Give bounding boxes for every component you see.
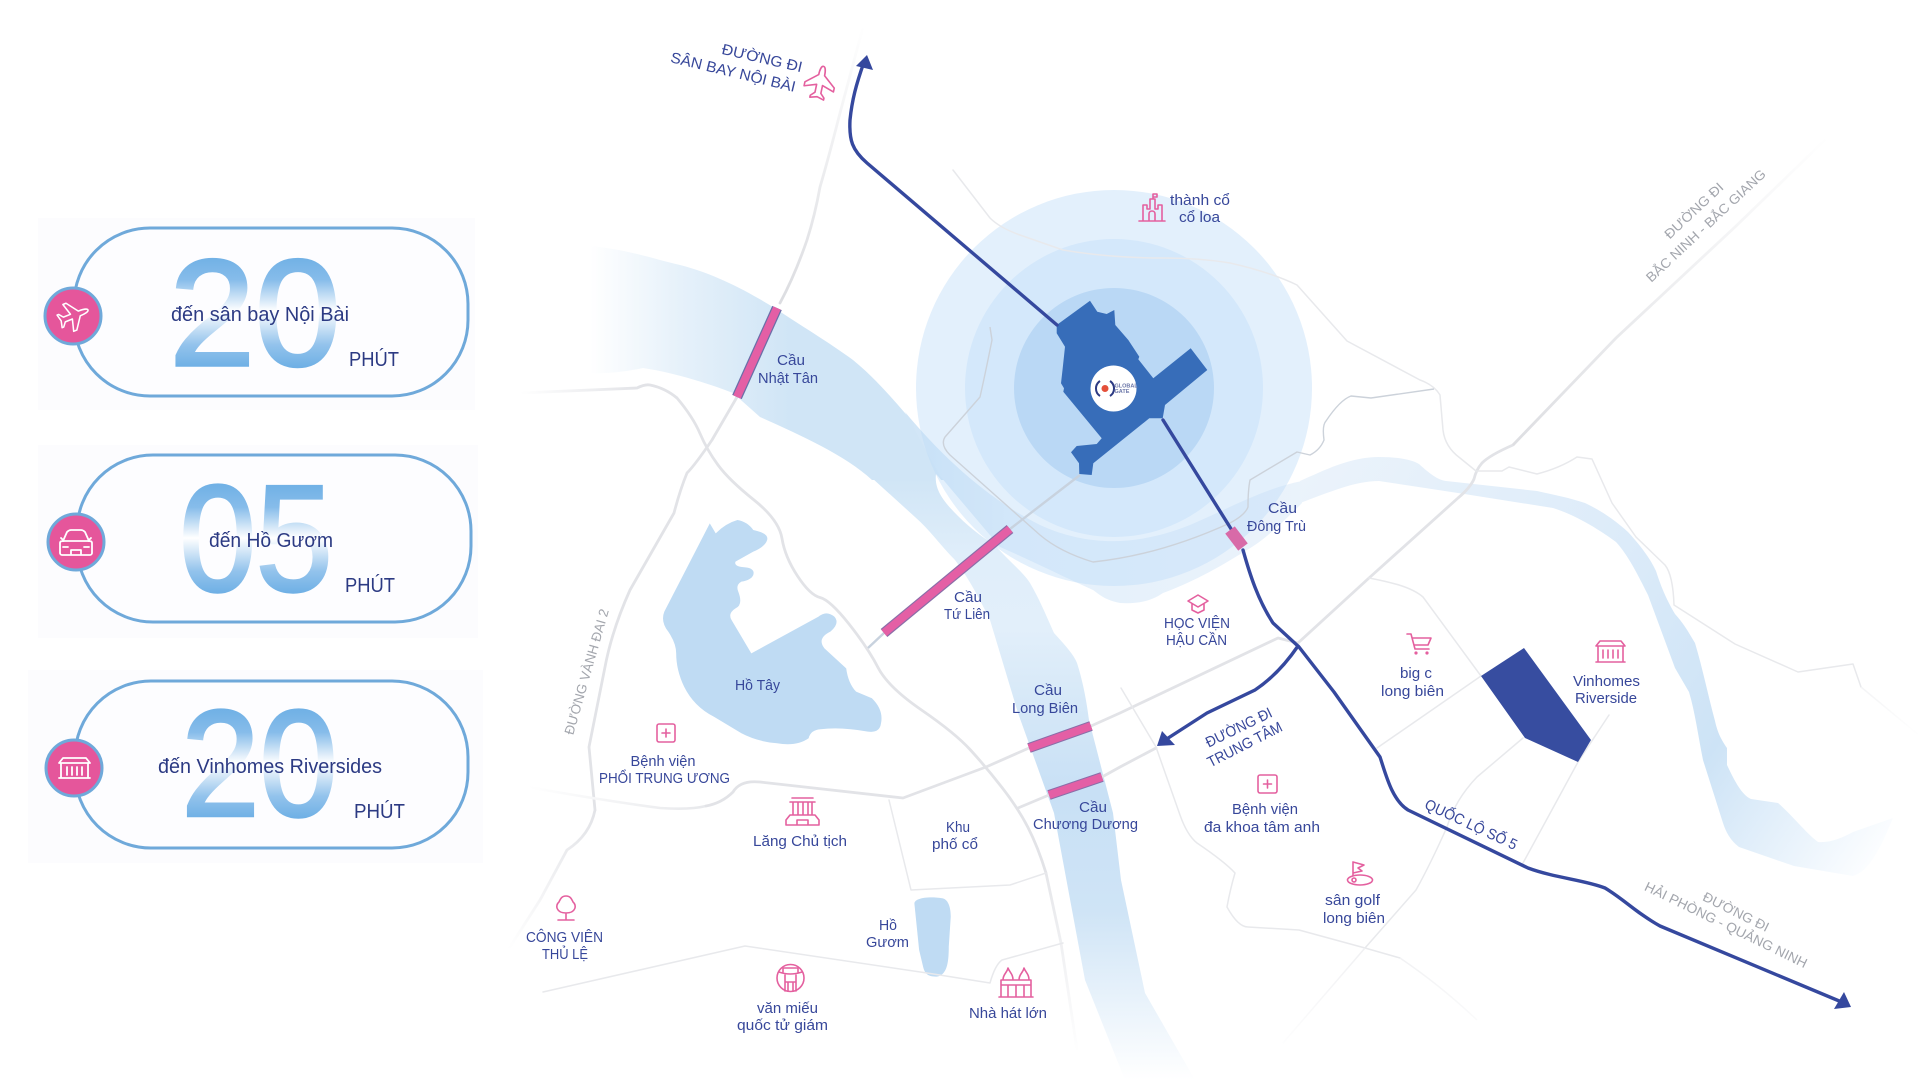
label: Hồ Gươm: Hồ xyxy=(879,917,897,934)
label: Khu phố cổ: phố cổ xyxy=(932,836,978,853)
panel: 05 minutes to Hồ Gươm xyxy=(38,445,478,638)
caption: đến sân bay Nội Bài xyxy=(171,304,349,326)
icon: villa badge xyxy=(46,740,102,796)
icon: graduation cap xyxy=(1188,595,1208,613)
landmark: Vinhomes Riverside xyxy=(1573,641,1640,707)
landmark: Học viện Hậu Cần: HỌC VIỆN xyxy=(1164,615,1230,632)
site radius circles xyxy=(916,190,1312,586)
landmark: Sân golf Long Biên: long biên xyxy=(1323,910,1385,927)
icon: villa xyxy=(1596,641,1625,662)
icon: shopping cart xyxy=(1407,634,1431,655)
landmark: Thành cổ Cổ Loa xyxy=(1139,192,1230,226)
lake: Hồ Tây xyxy=(663,520,882,744)
landmark: Vinhomes Riverside: Vinhomes xyxy=(1573,673,1640,690)
caption: đến Vinhomes Riversides xyxy=(158,756,382,778)
landmark: Bệnh viện Phổi Trung Ương: PHỔI TRUNG ƯƠNG xyxy=(599,769,730,787)
unit: PHÚT xyxy=(354,800,405,823)
icon: airplane badge xyxy=(45,288,101,344)
landmark: Công viên Thủ Lệ: CÔNG VIÊN xyxy=(526,929,603,946)
icon: golf flag xyxy=(1348,862,1372,885)
landmark: Vinhomes Riverside: Riverside xyxy=(1575,690,1637,707)
site: Global Gate plot xyxy=(1057,301,1207,475)
label: road to city centre: TRUNG TÂM xyxy=(1205,719,1285,771)
landmark: Big C Long Biên: big c xyxy=(1400,665,1433,682)
label: road to Nội Bài airport: ĐƯỜNG ĐI xyxy=(720,41,804,76)
landmark: Sân golf Long Biên: sân golf xyxy=(1325,892,1381,909)
site: Vinhomes Riverside plot xyxy=(1481,648,1591,762)
landmark: Nhà hát lớn: Nhà hát lớn xyxy=(969,1005,1047,1022)
bridge: Tứ Liên xyxy=(884,529,1010,633)
label: Cầu Nhật Tân: Cầu xyxy=(777,352,805,369)
label: Cầu Đông Trù: Đông Trù xyxy=(1247,518,1306,535)
landmark: Văn Miếu Quốc Tử Giám: văn miếu xyxy=(757,1000,818,1017)
site: Global Gate logo xyxy=(1090,366,1138,412)
icon: tree xyxy=(557,896,575,920)
label: Cầu Long Biên xyxy=(1012,682,1078,717)
landmark: Công viên Thủ Lệ xyxy=(526,896,603,963)
site: Global Gate logo: GLOBAL xyxy=(1114,384,1138,390)
landmark: Văn Miếu Quốc Tử Giám xyxy=(737,964,828,1034)
icon: opera house xyxy=(999,968,1033,997)
landmark: Sân golf Long Biên xyxy=(1323,862,1385,927)
route: to Nội Bài airport xyxy=(850,55,1057,325)
label: Khu phố cổ: Khu xyxy=(946,819,970,836)
label: road to Hải Phòng - Quảng Ninh: HẢI PHÒNG - QUẢNG NINH xyxy=(1642,879,1810,971)
panel: 20 minutes to Vinhomes Riverside xyxy=(28,670,483,863)
landmark: Big C Long Biên: long biên xyxy=(1381,683,1444,700)
landmark: Lăng Chủ tịch xyxy=(753,798,847,850)
landmark: Học viện Hậu Cần xyxy=(1164,595,1230,649)
river: Red River north section xyxy=(587,246,945,480)
landmark: Nhà hát lớn xyxy=(969,968,1047,1022)
label: road to Bắc Ninh - Bắc Giang: BẮC NINH - BẮC GIANG xyxy=(1643,166,1769,285)
big number 20: 20 xyxy=(170,228,340,397)
label: Cầu Chương Dương xyxy=(1033,799,1138,833)
bridge: Đông Trù xyxy=(1230,530,1243,547)
landmark: Bệnh viện Tâm Anh: Bệnh viện xyxy=(1232,801,1298,818)
landmark: Thành cổ Cổ Loa: cổ loa xyxy=(1179,209,1221,226)
label: road to Hải Phòng - Quảng Ninh: ĐƯỜNG ĐI xyxy=(1700,889,1772,935)
label: Cầu Long Biên: Cầu xyxy=(1034,682,1062,699)
label: Cầu Chương Dương: Cầu xyxy=(1079,799,1107,816)
lake: Hồ Gươm xyxy=(914,897,951,977)
icon: hospital xyxy=(657,724,675,742)
road network xyxy=(508,27,1920,1050)
landmark: Học viện Hậu Cần: HẬU CẦN xyxy=(1166,632,1227,649)
landmark: Big C Long Biên xyxy=(1381,634,1444,700)
bridge: Nhật Tân xyxy=(737,308,777,397)
label: Hồ Gươm xyxy=(866,917,909,951)
route: to city centre xyxy=(1157,646,1298,746)
label: Đường Vành đai 2: ĐƯỜNG VÀNH ĐAI 2 xyxy=(562,607,612,736)
label: Cầu Nhật Tân xyxy=(758,352,818,387)
route: Quốc lộ số 5 xyxy=(1163,420,1851,1009)
bridge: Chương Dương xyxy=(1049,777,1102,795)
unit: PHÚT xyxy=(345,574,395,597)
unit: PHÚT xyxy=(349,348,399,371)
panel: 20 minutes to Nội Bài airport xyxy=(38,218,475,410)
label: Cầu Đông Trù xyxy=(1247,500,1306,535)
label: Cầu Tứ Liên xyxy=(944,589,990,623)
landmark: Thành cổ Cổ Loa: thành cổ xyxy=(1170,192,1230,209)
landmark: Công viên Thủ Lệ: THỦ LỆ xyxy=(542,945,588,963)
label: Cầu Nhật Tân: Nhật Tân xyxy=(758,370,818,387)
river: Red River south section xyxy=(872,478,1195,1080)
label: Hồ Gươm: Gươm xyxy=(866,934,909,951)
big number 05: 05 xyxy=(180,454,332,622)
label: Cầu Đông Trù: Cầu xyxy=(1268,500,1297,517)
map labels: bridges xyxy=(758,352,1306,833)
bridge: Long Biên xyxy=(1029,726,1091,748)
landmark: Bệnh viện Phổi Trung Ương xyxy=(599,724,730,787)
label: road to Bắc Ninh - Bắc Giang: ĐƯỜNG ĐI xyxy=(1661,180,1726,242)
label: Cầu Tứ Liên: Tứ Liên xyxy=(944,606,990,623)
label: road to city centre: ĐƯỜNG ĐI xyxy=(1203,705,1275,751)
bridges xyxy=(737,308,1243,795)
river: white sliver xyxy=(936,474,1000,548)
map: rivers xyxy=(587,246,1893,1080)
label: Hồ Tây: Hồ Tây xyxy=(735,677,780,694)
label: Quốc lộ số 5: QUỐC LỘ SỐ 5 xyxy=(1422,795,1520,854)
site: Global Gate logo: GATE xyxy=(1114,389,1130,395)
label: Cầu Long Biên: Long Biên xyxy=(1012,700,1078,717)
caption: đến Hồ Gươm xyxy=(209,530,333,552)
icon: mausoleum xyxy=(786,798,819,825)
icon: hospital xyxy=(1258,775,1277,793)
label: Cầu Tứ Liên: Cầu xyxy=(954,589,982,606)
big number 20: 20 xyxy=(182,678,338,848)
landmark: Lăng Chủ tịch: Lăng Chủ tịch xyxy=(753,833,847,850)
landmark: Bệnh viện Phổi Trung Ương: Bệnh viện xyxy=(630,753,696,770)
icon: castle xyxy=(1139,194,1165,221)
river: Duong branch west section xyxy=(905,412,1302,603)
label: road to Nội Bài airport: SÂN BAY NỘI BÀI xyxy=(669,49,797,96)
icon: temple gate xyxy=(777,964,804,992)
landmark: Bệnh viện Tâm Anh xyxy=(1204,775,1320,836)
label: Cầu Chương Dương: Chương Dương xyxy=(1033,816,1138,833)
landmark: Văn Miếu Quốc Tử Giám: quốc tử giám xyxy=(737,1017,828,1034)
landmark: Bệnh viện Tâm Anh: đa khoa tâm anh xyxy=(1204,819,1320,836)
river: Duong branch xyxy=(1300,457,1893,876)
icon: airplane outline xyxy=(802,63,838,102)
icon: car badge xyxy=(48,514,104,570)
label: Khu phố cổ xyxy=(932,819,978,853)
